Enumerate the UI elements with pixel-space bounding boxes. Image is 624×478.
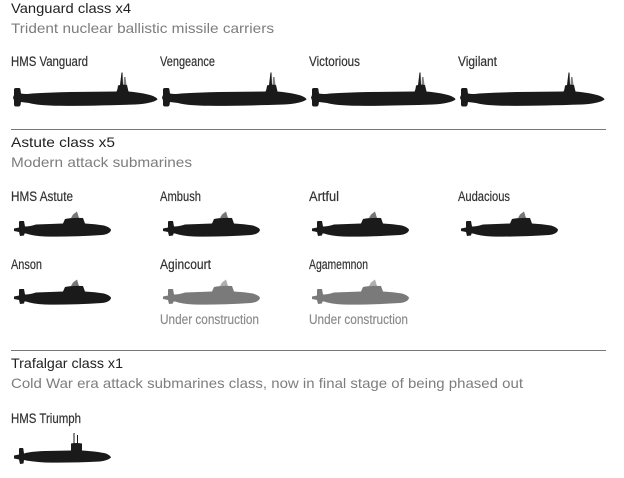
submarine: Vigilant: Vigilant [458,54,497,69]
panel: Trafalgar class [11,355,523,464]
submarine: Vigilant [458,54,604,106]
submarine: Agamemnon, under construction: Under construction [309,312,408,327]
submarine: Vengeance: Vengeance [160,54,215,69]
panel: Vanguard class [11,0,604,106]
subheading: Astute class: Modern attack submarines [11,154,192,170]
panel: Astute class [11,134,558,327]
submarine: HMS Triumph: HMS Triumph [11,411,81,426]
submarine: Victorious [309,54,456,106]
submarine: HMS Triumph [11,411,111,464]
submarine: Victorious: Victorious [309,54,360,69]
submarine: HMS Vanguard [11,54,158,106]
submarine: HMS Astute [11,189,111,237]
submarine: Ambush [160,189,260,237]
submarine: Ambush: Ambush [160,189,201,204]
submarine: HMS Astute: HMS Astute [11,189,73,204]
submarine: Agincourt, under construction: Under construction [160,312,259,327]
submarine: Audacious: Audacious [458,189,510,204]
submarine: Vengeance [160,54,306,106]
submarine: Agincourt, under construction [160,257,260,327]
heading: Astute class: Astute class x5 [11,134,115,150]
submarine: Agamemnon, under construction: Agamemnon [309,257,368,272]
subheading: Vanguard class: Trident nuclear ballistic missile carriers [11,20,274,36]
heading: Vanguard class: Vanguard class x4 [11,0,131,16]
heading: Trafalgar class: Trafalgar class x1 [11,355,123,371]
submarine: Artful: Artful [309,189,339,204]
submarine: HMS Vanguard: HMS Vanguard [11,54,88,69]
submarine: Artful [309,189,409,237]
submarine: Anson [11,257,111,305]
submarine: Anson: Anson [11,257,42,272]
submarine: Agincourt, under construction: Agincourt [160,257,211,272]
subheading: Trafalgar class: Cold War era attack submarines class, now in final stage of being phased out [11,375,523,391]
submarine: Agamemnon, under construction [309,257,409,327]
submarine: Audacious [458,189,558,237]
